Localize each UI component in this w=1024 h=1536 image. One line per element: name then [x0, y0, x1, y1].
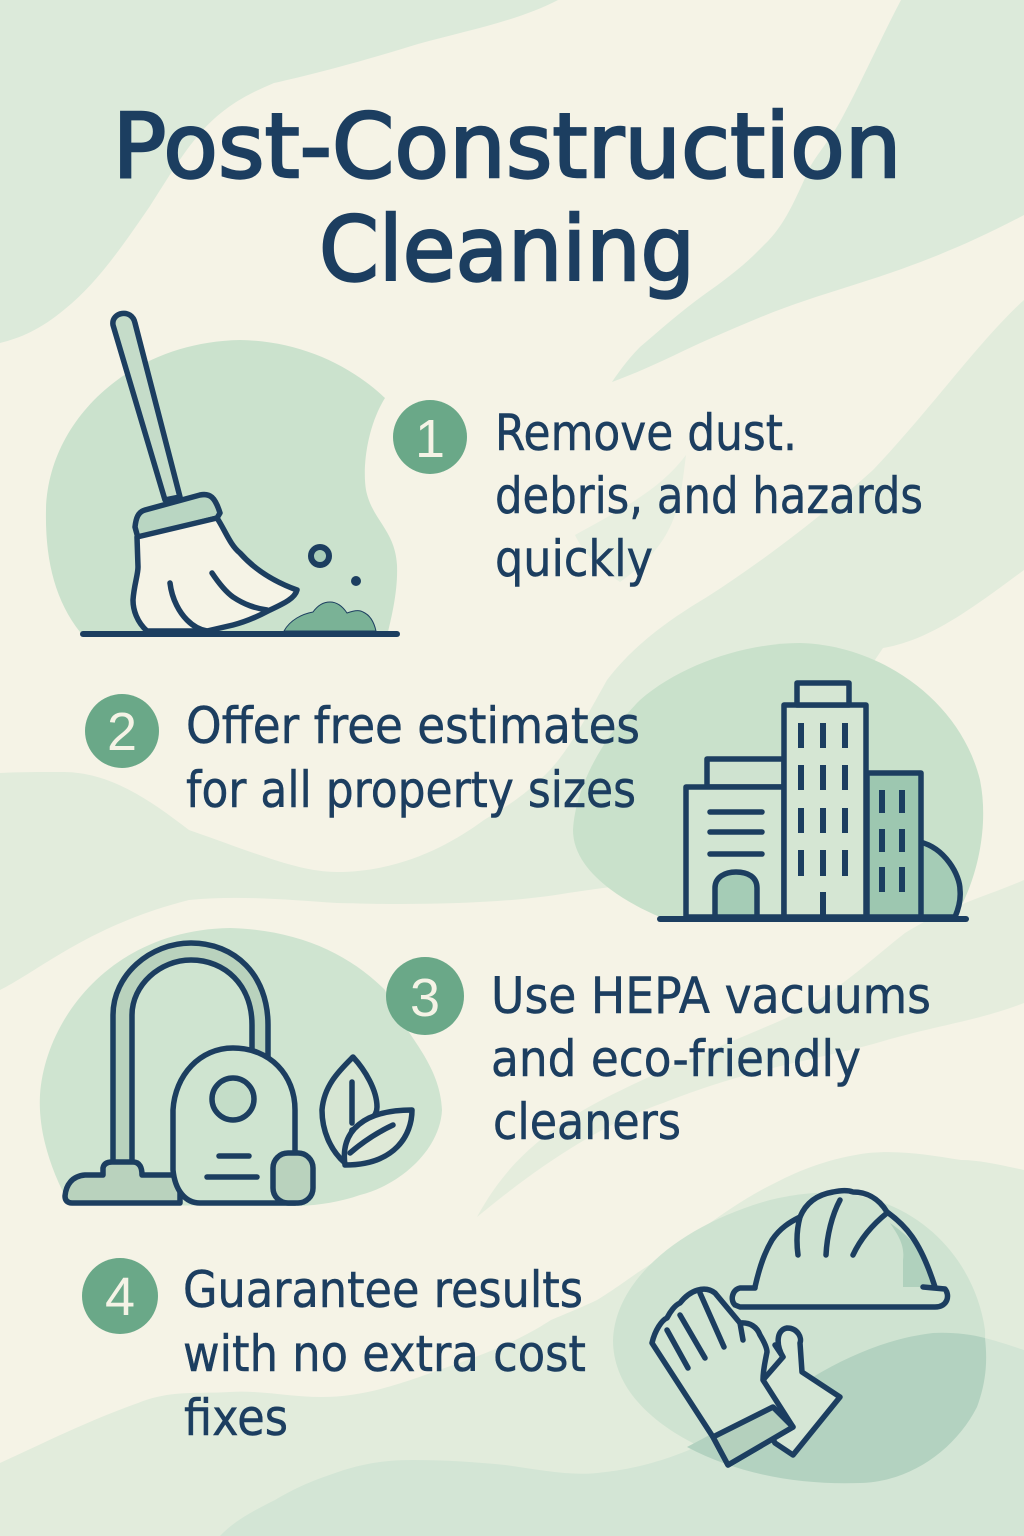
text: step 4: fixes	[184, 1389, 288, 1447]
number badge 4	[82, 1258, 158, 1334]
text: step 1	[495, 404, 923, 588]
text: step 3: Use HEPA vacuums	[491, 967, 931, 1025]
text: step 2: Offer free estimates	[186, 697, 640, 755]
title	[112, 94, 902, 301]
title: Post-Construction	[112, 94, 902, 198]
text: step 1: quickly	[495, 530, 653, 588]
icon: buildings	[573, 643, 983, 919]
number badge 4: 4	[105, 1267, 135, 1327]
number badge 1	[393, 400, 467, 474]
text: step 4: Guarantee results	[183, 1261, 583, 1319]
panel: step 4	[82, 1190, 986, 1483]
number badge 2: 2	[107, 702, 137, 762]
number badge 1: 1	[415, 409, 445, 469]
icon: hard hat and gloves	[613, 1190, 986, 1483]
text: step 2	[186, 697, 640, 819]
text: step 3	[491, 967, 931, 1151]
icon: vacuum and leaf	[40, 928, 442, 1206]
number badge 3	[386, 957, 464, 1035]
number badge 2	[85, 694, 159, 768]
panel: step 2	[85, 643, 983, 919]
text: step 1: Remove dust.	[495, 404, 797, 462]
text: step 1: debris, and hazards	[495, 467, 923, 525]
panel: step 3	[40, 928, 931, 1206]
text: step 2: for all property sizes	[186, 761, 636, 819]
text: step 3: cleaners	[493, 1093, 681, 1151]
text: step 3: and eco-friendly	[491, 1030, 861, 1088]
text: step 4	[183, 1261, 586, 1447]
panel: step 1	[46, 313, 923, 634]
number badge 3: 3	[410, 968, 440, 1028]
title: Cleaning	[319, 197, 695, 301]
text: step 4: with no extra cost	[183, 1325, 586, 1383]
icon: broom and dust	[46, 313, 397, 634]
